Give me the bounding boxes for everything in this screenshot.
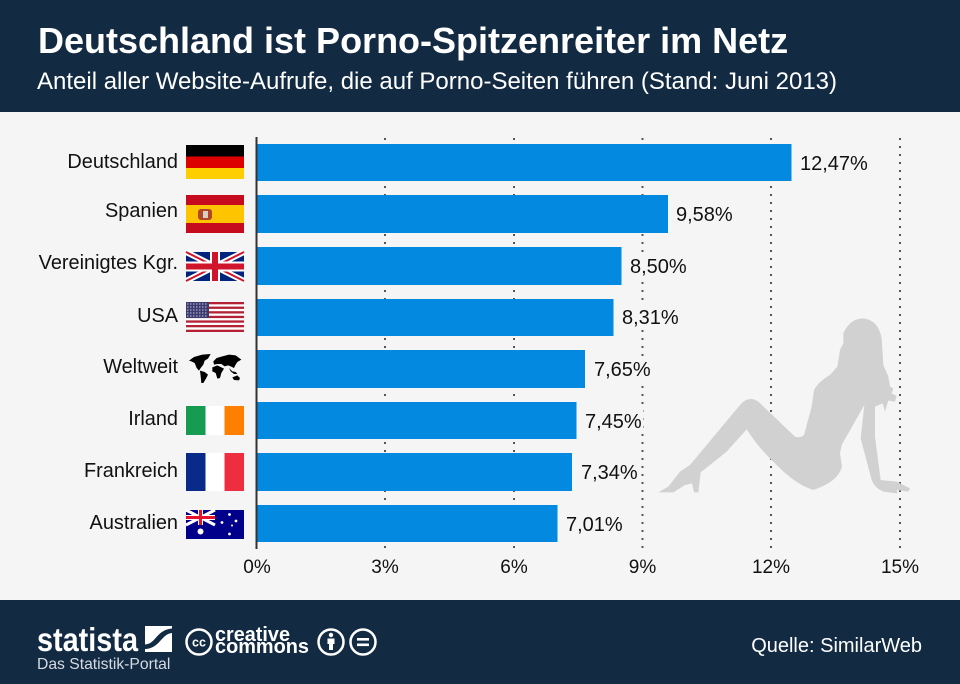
header band	[0, 0, 960, 112]
silhouette illustration	[658, 318, 910, 493]
value labels	[564, 152, 868, 537]
icon: flag USA	[186, 302, 244, 332]
value labels: 12,47%	[800, 153, 868, 175]
icon: flag Ireland	[186, 406, 244, 435]
bars	[257, 144, 792, 542]
icon: flag France	[186, 453, 244, 491]
axis labels: 6%	[500, 557, 528, 578]
subtitle: Anteil aller Website-Aufrufe, die auf Porno-Seiten führen (Stand: Juni 2013)	[37, 68, 837, 95]
category labels: Irland	[128, 408, 178, 430]
icon: attribution	[318, 630, 344, 654]
icon: flag Germany	[186, 145, 244, 179]
category labels: Spanien	[105, 200, 178, 222]
source: Quelle: SimilarWeb	[751, 635, 922, 657]
category labels: Australien	[90, 512, 178, 534]
value labels: 7,45%	[585, 411, 642, 433]
statista logo: statista	[37, 621, 139, 658]
creative commons logo	[186, 624, 309, 658]
grid lines	[385, 138, 900, 548]
axis labels: 12%	[752, 557, 790, 578]
footer band	[0, 600, 960, 684]
icon: no derivatives	[350, 630, 376, 654]
category labels	[39, 151, 179, 534]
icon: world map	[189, 354, 241, 383]
axis labels: 9%	[629, 557, 656, 578]
icon: flag Spain	[186, 195, 244, 233]
axis labels: 0%	[243, 557, 271, 578]
title: Deutschland ist Porno-Spitzenreiter im Netz	[38, 20, 788, 61]
value labels: 7,01%	[566, 514, 623, 536]
axis labels: 15%	[881, 557, 919, 578]
creative commons logo: cc	[192, 636, 206, 650]
category labels: Frankreich	[84, 460, 178, 482]
axis labels: 3%	[371, 557, 399, 578]
value labels: 8,31%	[622, 307, 679, 329]
value labels: 7,65%	[594, 359, 651, 381]
value labels: 8,50%	[630, 256, 687, 278]
tagline: Das Statistik-Portal	[37, 656, 170, 673]
axis labels	[243, 557, 919, 578]
zero axis	[256, 137, 258, 549]
icon: flag Australia	[186, 510, 244, 539]
category labels: Weltweit	[103, 356, 178, 378]
category labels: USA	[137, 305, 179, 327]
statista logo	[37, 621, 172, 673]
creative commons logo: creative	[215, 624, 290, 646]
category labels: Vereinigtes Kgr.	[39, 252, 178, 274]
bar chart	[39, 137, 919, 578]
value labels: 9,58%	[676, 204, 733, 226]
creative commons logo: commons	[215, 636, 309, 658]
value labels: 7,34%	[581, 462, 638, 484]
icon: flag United Kingdom	[186, 252, 244, 281]
category labels: Deutschland	[67, 151, 178, 173]
